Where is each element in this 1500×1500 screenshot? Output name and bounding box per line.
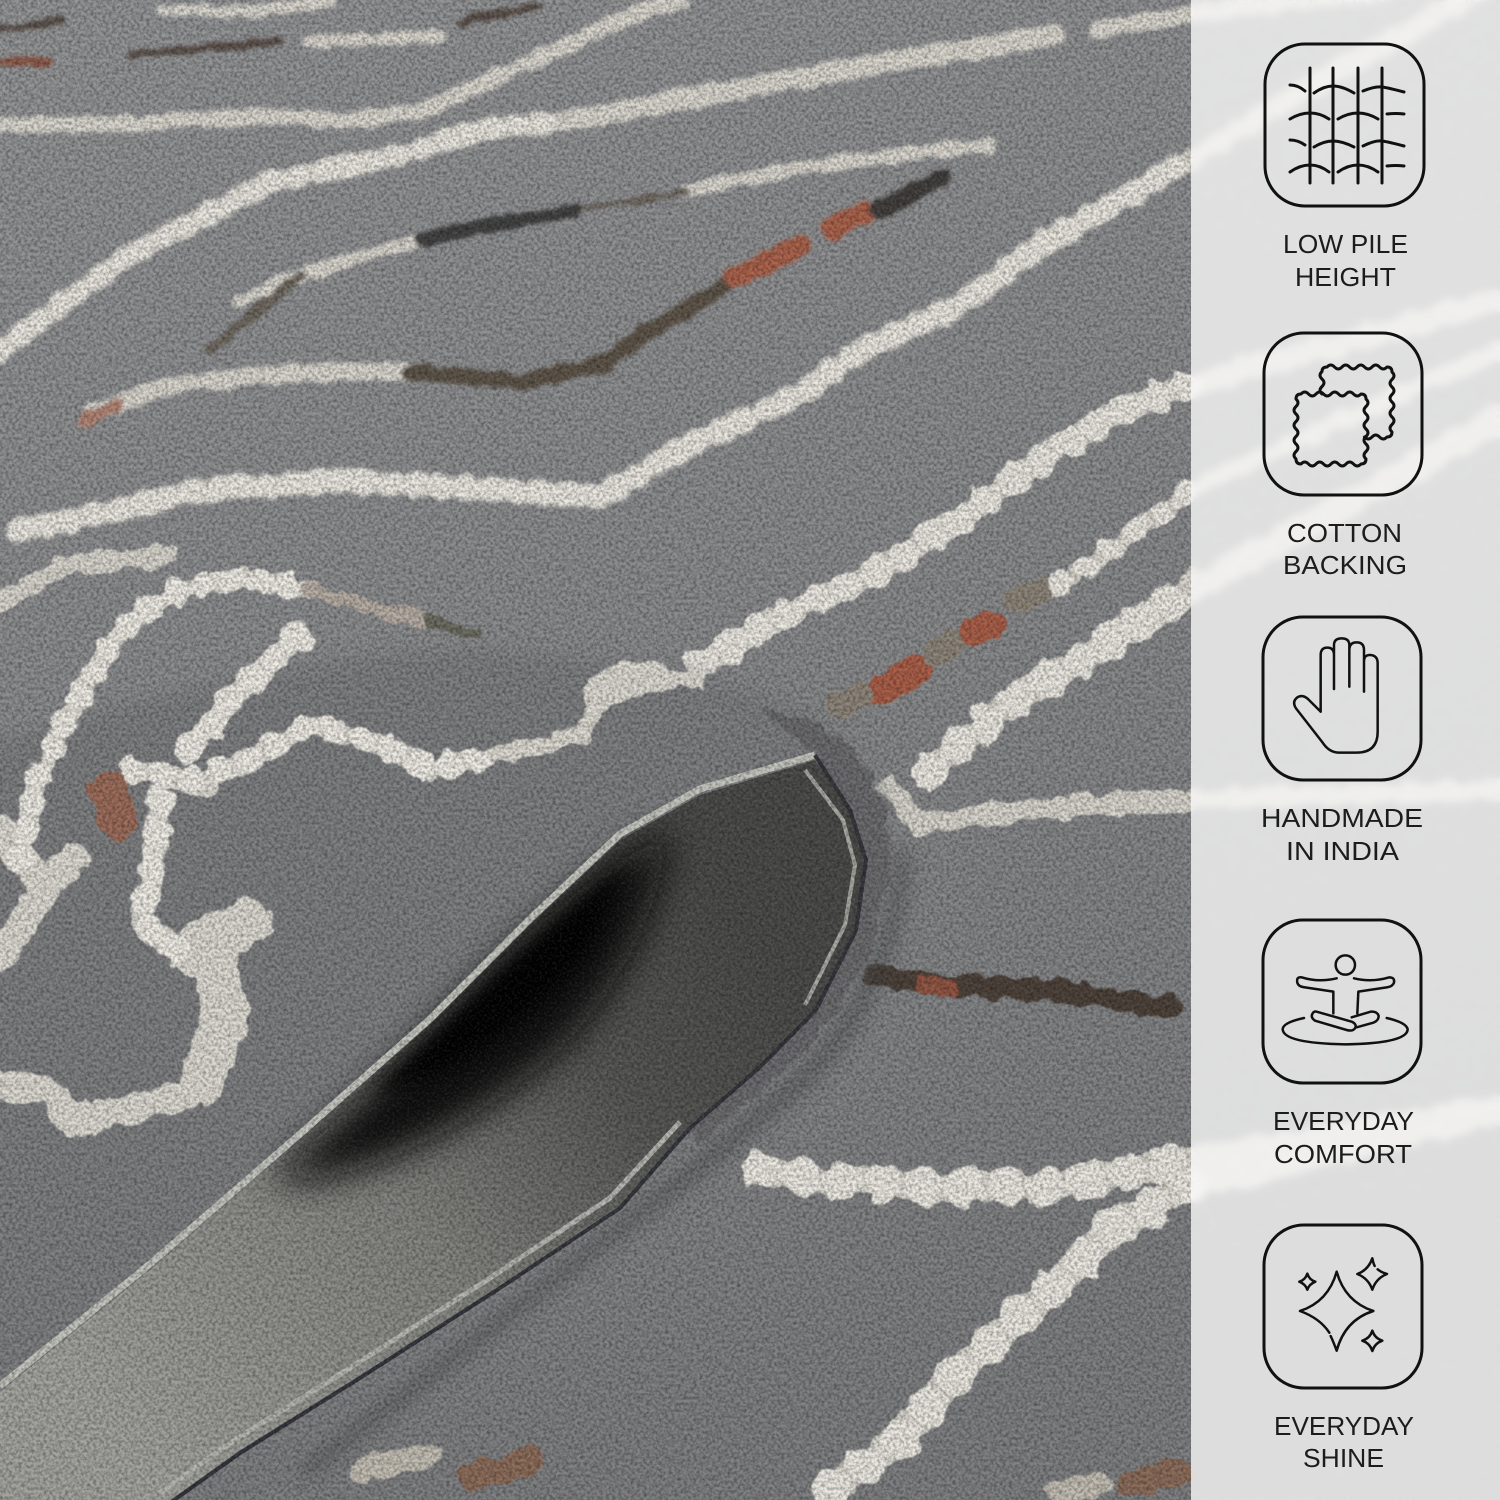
label: everyday shine: EVERYDAY bbox=[1274, 1411, 1414, 1441]
icon: open hand bbox=[1263, 617, 1421, 780]
pale selvedge on fold bbox=[0, 755, 815, 1386]
label: low pile height: HEIGHT bbox=[1295, 262, 1396, 292]
feature: handmade in india bbox=[1261, 617, 1423, 866]
icon: sparkles bbox=[1264, 1225, 1422, 1388]
feature: everyday shine bbox=[1264, 1225, 1422, 1473]
label: low pile height: LOW PILE bbox=[1283, 229, 1408, 259]
label: cotton backing: COTTON bbox=[1287, 518, 1402, 548]
icon: meditating figure bbox=[1263, 920, 1421, 1083]
feature: low pile height bbox=[1265, 44, 1424, 292]
label: everyday comfort: EVERYDAY bbox=[1273, 1106, 1414, 1136]
icon: woven pile grid bbox=[1265, 44, 1424, 206]
rolled rug top surface bbox=[0, 650, 890, 1500]
feature: everyday comfort bbox=[1263, 920, 1421, 1169]
label: handmade in india: IN INDIA bbox=[1286, 836, 1400, 866]
label: handmade in india: HANDMADE bbox=[1261, 803, 1423, 833]
feature: cotton backing bbox=[1264, 333, 1422, 580]
near cream pattern lines bbox=[0, 300, 1500, 1490]
far cream pattern lines bbox=[0, 0, 1500, 530]
label: cotton backing: BACKING bbox=[1283, 550, 1407, 580]
icon: fabric swatches bbox=[1264, 333, 1422, 495]
shadow beneath roll bbox=[300, 850, 900, 1470]
rounded outer rim of roll bbox=[685, 708, 890, 1145]
panel: translucent feature column bbox=[1191, 0, 1500, 1500]
label: everyday shine: SHINE bbox=[1303, 1443, 1384, 1473]
cream pattern on roll bbox=[0, 578, 700, 1120]
dark interior of the fold bbox=[270, 830, 670, 1181]
label: everyday comfort: COMFORT bbox=[1274, 1139, 1412, 1169]
underside backing of rug bbox=[0, 755, 866, 1500]
